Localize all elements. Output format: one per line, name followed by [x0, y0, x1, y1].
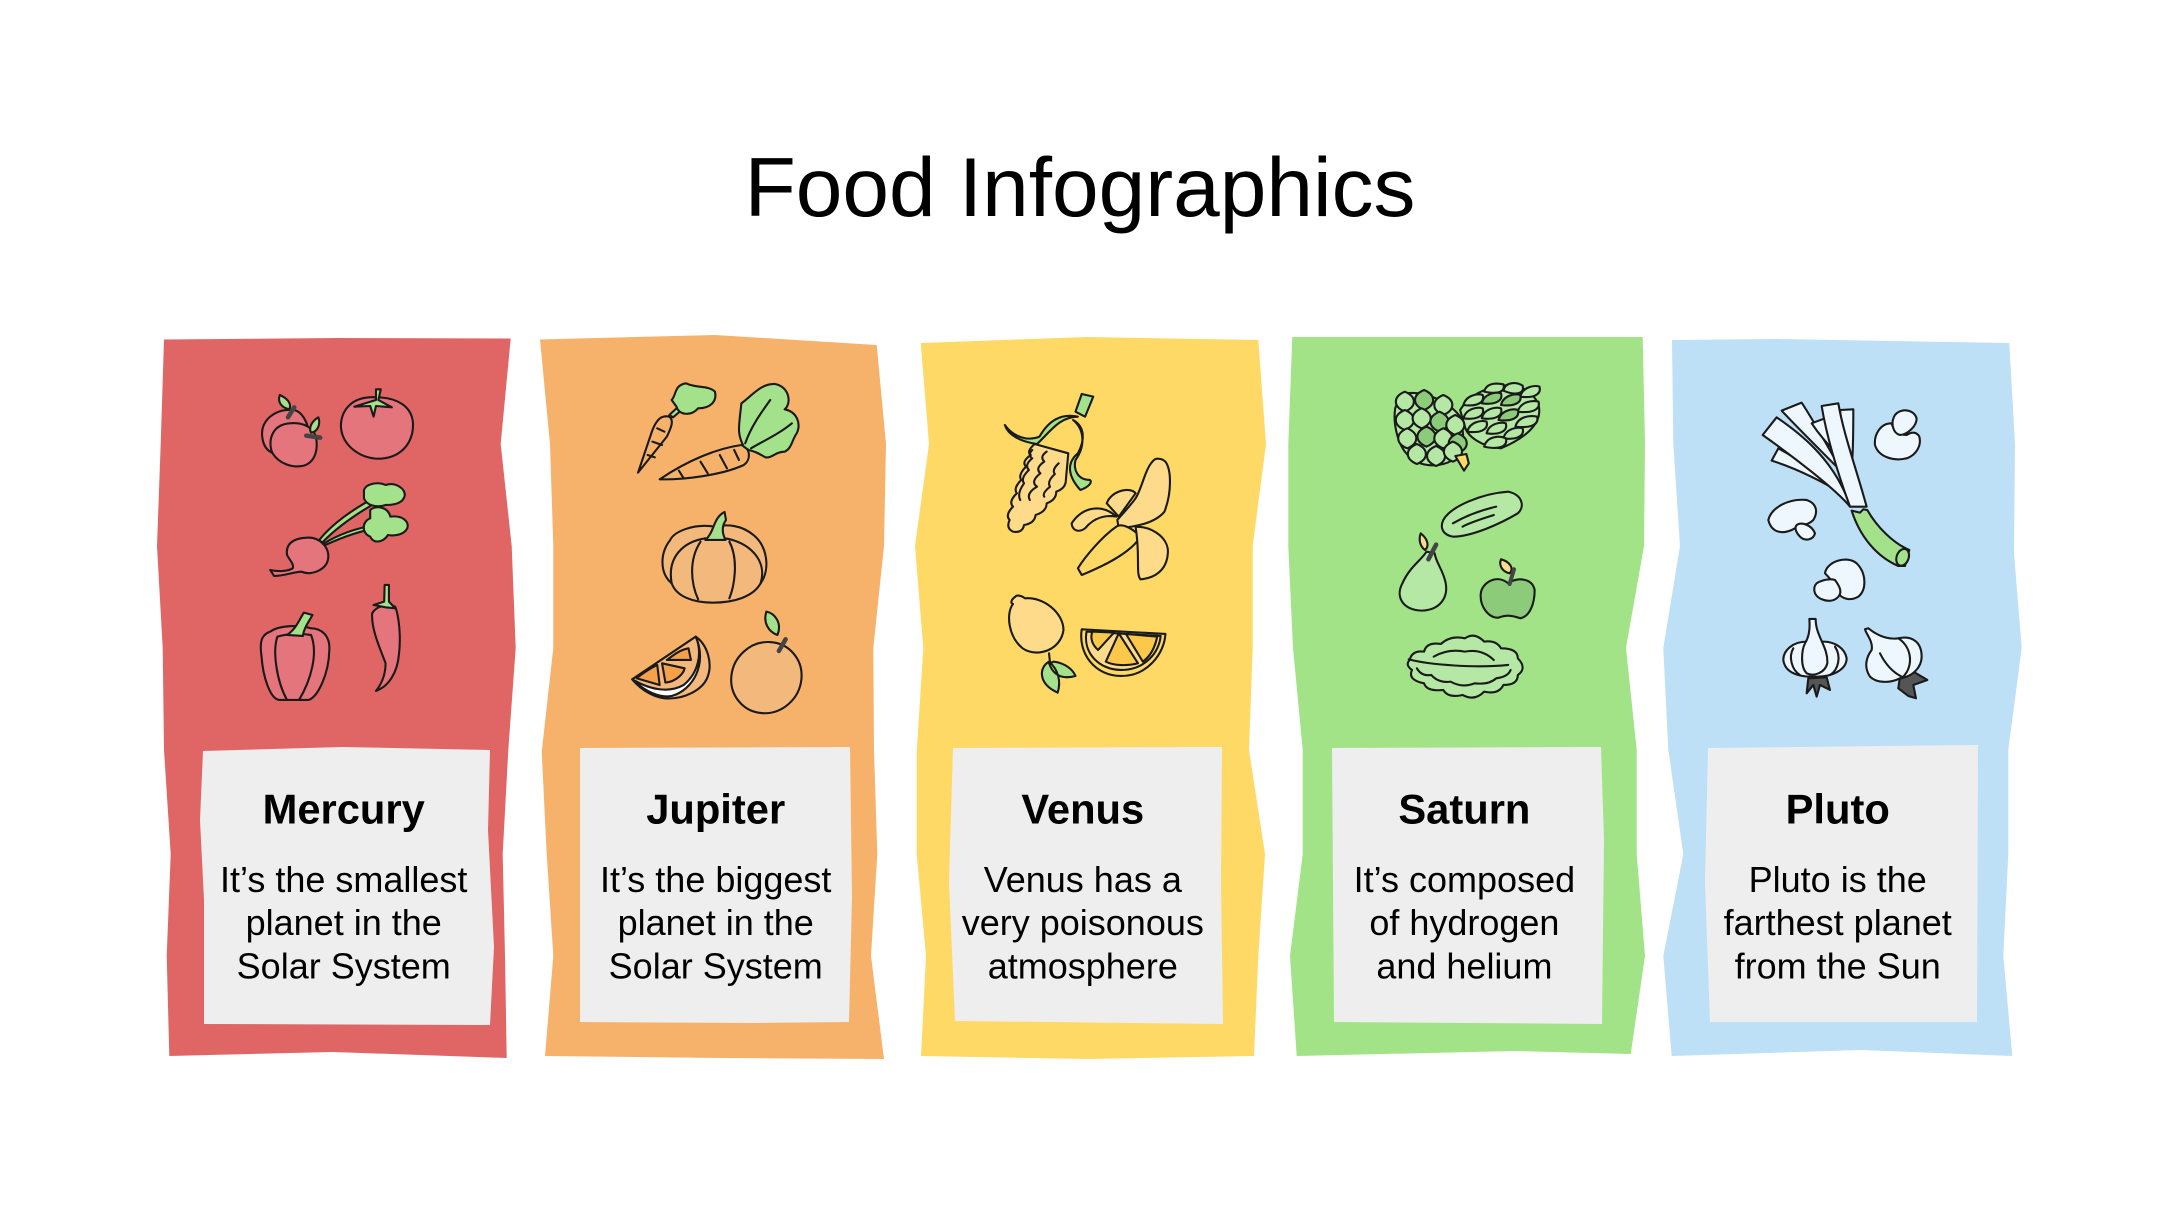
description: Pluto: farthest planet [1724, 902, 1952, 943]
description: Mercury: planet in the [246, 902, 442, 943]
heading: Jupiter: Jupiter [646, 786, 785, 833]
description: Pluto: Pluto is the [1749, 859, 1927, 900]
panel background: green [1288, 337, 1645, 1056]
text box: Venus [949, 747, 1223, 1024]
description: Pluto: from the Sun [1735, 945, 1941, 986]
description: Saturn: It’s composed [1354, 859, 1575, 900]
description: Venus: atmosphere [988, 945, 1178, 986]
description: Venus: Venus has a [984, 859, 1182, 900]
panel background: red [157, 338, 516, 1058]
panel background: blue [1663, 339, 2022, 1056]
description: Venus: very poisonous [962, 902, 1204, 943]
text box: Saturn [1332, 747, 1604, 1024]
icons: red vegetables [261, 389, 413, 700]
heading: Pluto: Pluto [1786, 786, 1890, 833]
description: Jupiter: It’s the biggest [600, 859, 831, 900]
heading: Venus: Venus [1021, 786, 1144, 833]
description: Saturn: and helium [1376, 945, 1552, 986]
text box: Mercury [200, 747, 494, 1025]
panel: Pluto [1663, 339, 2022, 1056]
panel: Venus [915, 337, 1266, 1059]
panel: Mercury [157, 338, 516, 1058]
icons: blue vegetables [1763, 403, 1927, 698]
description: Jupiter: Solar System [609, 945, 823, 986]
icons: orange vegetables [632, 383, 805, 715]
text box: Pluto [1705, 745, 1978, 1022]
panel background: orange [540, 335, 886, 1059]
heading: Saturn: Saturn [1398, 786, 1530, 833]
description: Saturn: of hydrogen [1369, 902, 1559, 943]
icons: yellow vegetables [1005, 394, 1170, 693]
heading: Mercury: Mercury [263, 786, 425, 833]
description: Jupiter: planet in the [618, 902, 814, 943]
title: Food Infographics [745, 140, 1415, 234]
panel background: yellow [915, 337, 1266, 1059]
description: Mercury: Solar System [237, 945, 451, 986]
panel: Jupiter [540, 335, 886, 1059]
text box: Jupiter [580, 747, 852, 1023]
panel: Saturn [1288, 337, 1645, 1056]
icons: green vegetables [1395, 383, 1540, 698]
description: Mercury: It’s the smallest [220, 859, 467, 900]
